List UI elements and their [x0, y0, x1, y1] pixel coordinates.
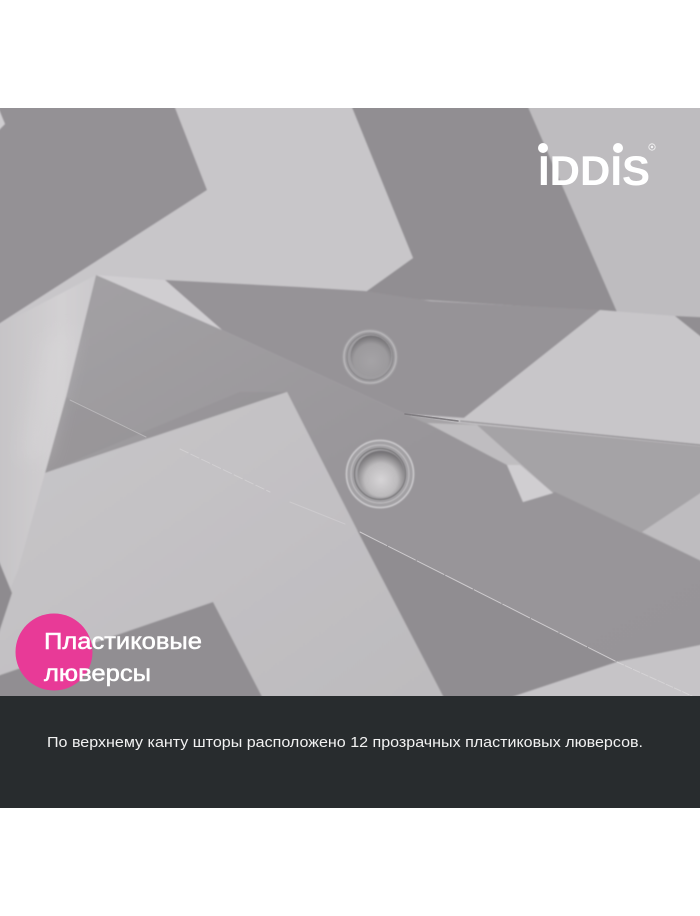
grommet: lower — [345, 439, 415, 509]
heading line 2: люверсы — [44, 660, 151, 686]
bottom dark chevron — [0, 602, 262, 696]
heading — [44, 628, 202, 686]
infographic canvas — [0, 108, 700, 808]
grommet: upper — [342, 329, 398, 385]
light triangle at right edge — [642, 493, 700, 560]
fold light strip at apex — [105, 277, 216, 326]
front light panel — [150, 394, 442, 696]
hem seam shadow — [460, 421, 700, 447]
flap section below the stitch on the left, darker — [45, 392, 287, 473]
logo registered mark — [649, 144, 655, 150]
right back light panel — [525, 100, 700, 322]
dark caption band — [0, 696, 700, 808]
logo dot: first i — [538, 143, 548, 153]
small light corner patch — [0, 110, 6, 130]
dark triangle at left edge — [0, 562, 12, 631]
soft highlight on the roll — [20, 330, 75, 460]
lower back layer dark mesh — [407, 415, 700, 555]
lower right light panel — [455, 641, 700, 716]
back chevron left — [0, 100, 207, 336]
heading line 1: Пластиковые — [44, 628, 202, 654]
upper hem, light panel on right — [464, 310, 617, 418]
logo: iddis — [538, 143, 655, 194]
left roll of light fabric — [48, 290, 70, 458]
stitch lines — [70, 400, 692, 696]
fabric: shapes of the chevron print and folds — [0, 90, 700, 716]
light strip behind flap — [428, 423, 537, 479]
logo dot: second i — [613, 143, 623, 153]
back chevron centre — [349, 100, 617, 312]
photo: curtain fabric with grommets — [0, 90, 700, 716]
pink circle accent — [16, 614, 92, 690]
front flap dark — [45, 275, 700, 662]
back layer light fabric — [0, 108, 698, 446]
upper hem, dark corner — [676, 316, 700, 336]
logo wordmark: IDDIS — [538, 147, 650, 194]
upper hem, dark — [165, 280, 600, 418]
lower dark band — [357, 530, 616, 696]
small light triangle — [507, 465, 553, 502]
caption text: По верхнему канту шторы расположено 12 прозрачных пластиковых люверсов. — [47, 734, 643, 751]
